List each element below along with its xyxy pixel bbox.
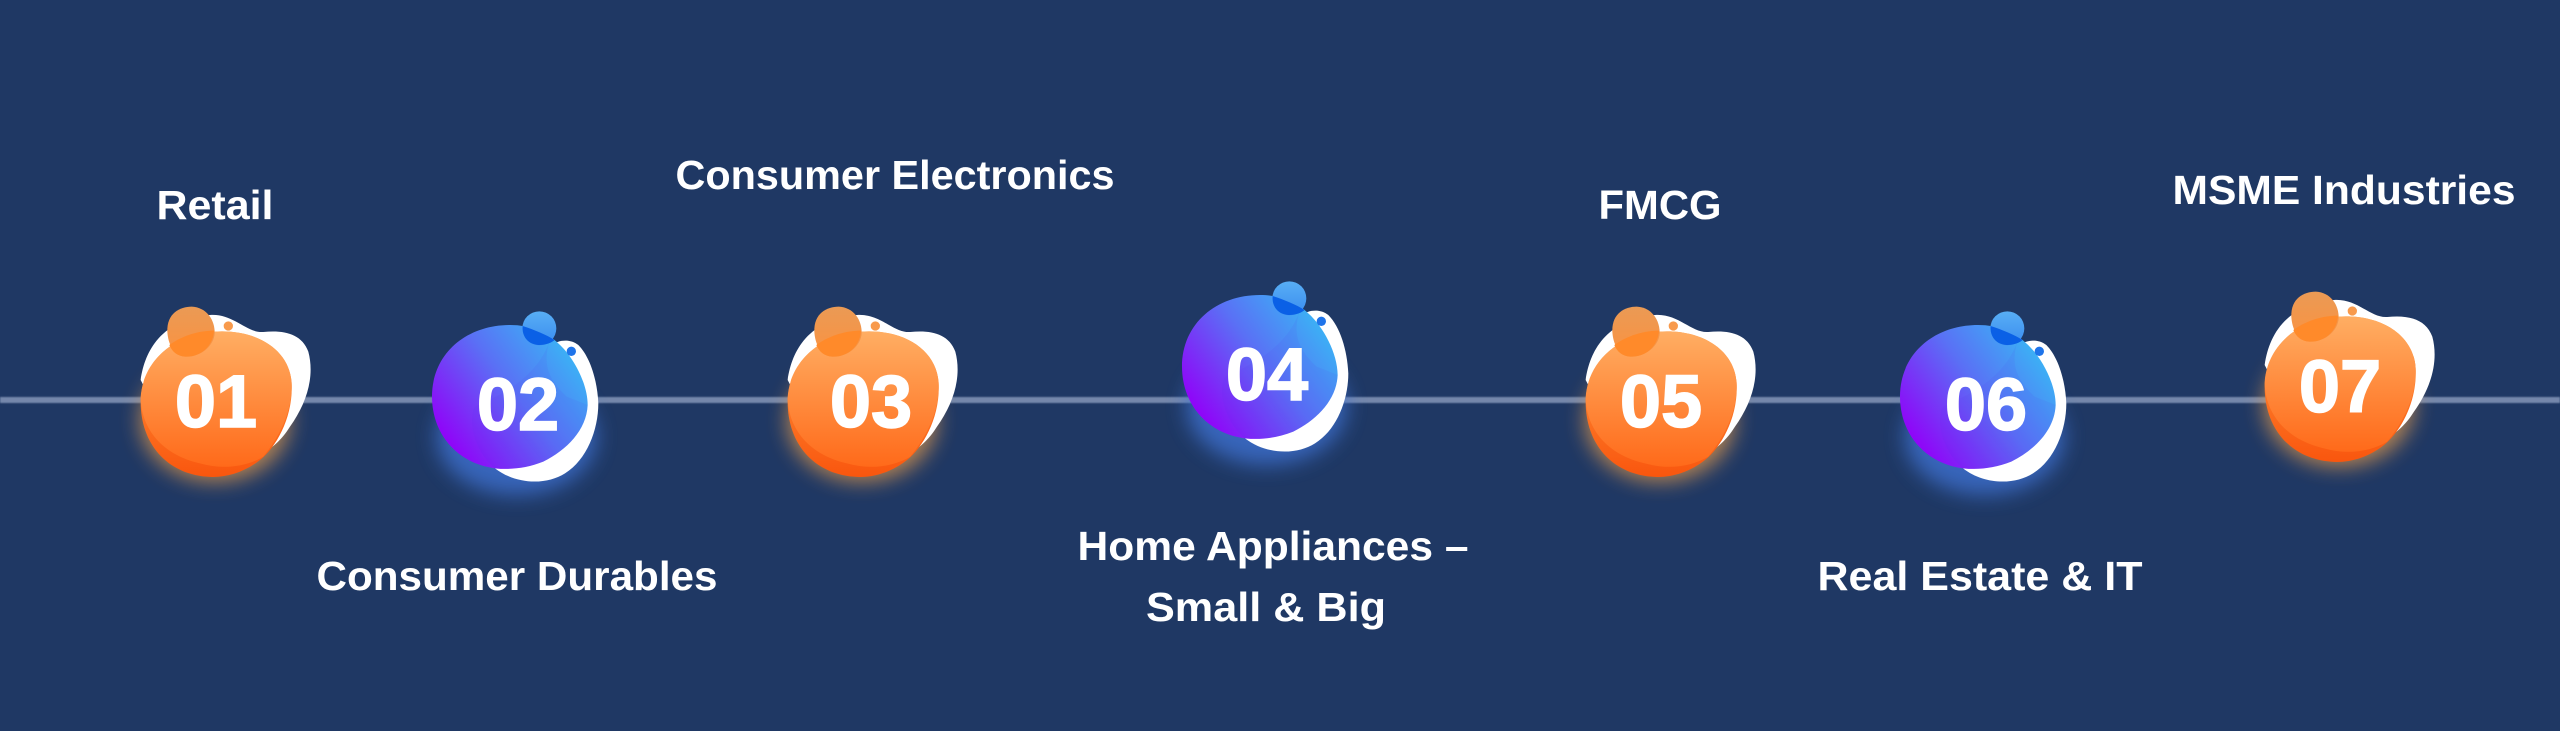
step 04: Home Appliances	[1078, 281, 1468, 630]
icon: blue blob 04	[1182, 281, 1348, 465]
icon: orange blob 07	[2264, 292, 2435, 467]
icon: orange blob 07: 07	[2299, 345, 2381, 428]
step 03: Consumer Electronics	[676, 152, 1114, 482]
icon: blue blob 04: 04	[1226, 333, 1308, 416]
icon: blue blob 02: 02	[477, 363, 559, 446]
step 05: FMCG	[1585, 182, 1756, 482]
label: MSME Industries: MSME Industries	[2172, 167, 2516, 213]
label: Home Appliances – Small & Big: Home Appliances –	[1078, 523, 1468, 569]
timeline line	[0, 397, 2560, 403]
label: Consumer Electronics: Consumer Electronics	[676, 152, 1114, 198]
step 02: Consumer Durables	[316, 311, 718, 599]
label: Home Appliances – Small & Big: Small & Big	[1146, 584, 1386, 630]
icon: blue blob 02	[432, 311, 598, 495]
icon: orange blob 01	[140, 307, 311, 482]
label: Real Estate & IT: Real Estate & IT	[1818, 553, 2142, 599]
icon: orange blob 03	[787, 307, 958, 482]
icon: orange blob 03: 03	[830, 360, 912, 443]
icon: orange blob 05: 05	[1620, 360, 1702, 443]
step 07: MSME Industries	[2172, 167, 2516, 467]
label: Consumer Durables: Consumer Durables	[316, 553, 718, 599]
label: Retail: Retail	[156, 182, 274, 228]
step 06: Real Estate & IT	[1818, 311, 2142, 599]
icon: blue blob 06: 06	[1945, 363, 2027, 446]
icon: blue blob 06	[1900, 311, 2066, 495]
icon: orange blob 05	[1585, 307, 1756, 482]
step 01: Retail	[140, 182, 311, 482]
label: FMCG: FMCG	[1598, 182, 1722, 228]
icon: orange blob 01: 01	[175, 360, 257, 443]
